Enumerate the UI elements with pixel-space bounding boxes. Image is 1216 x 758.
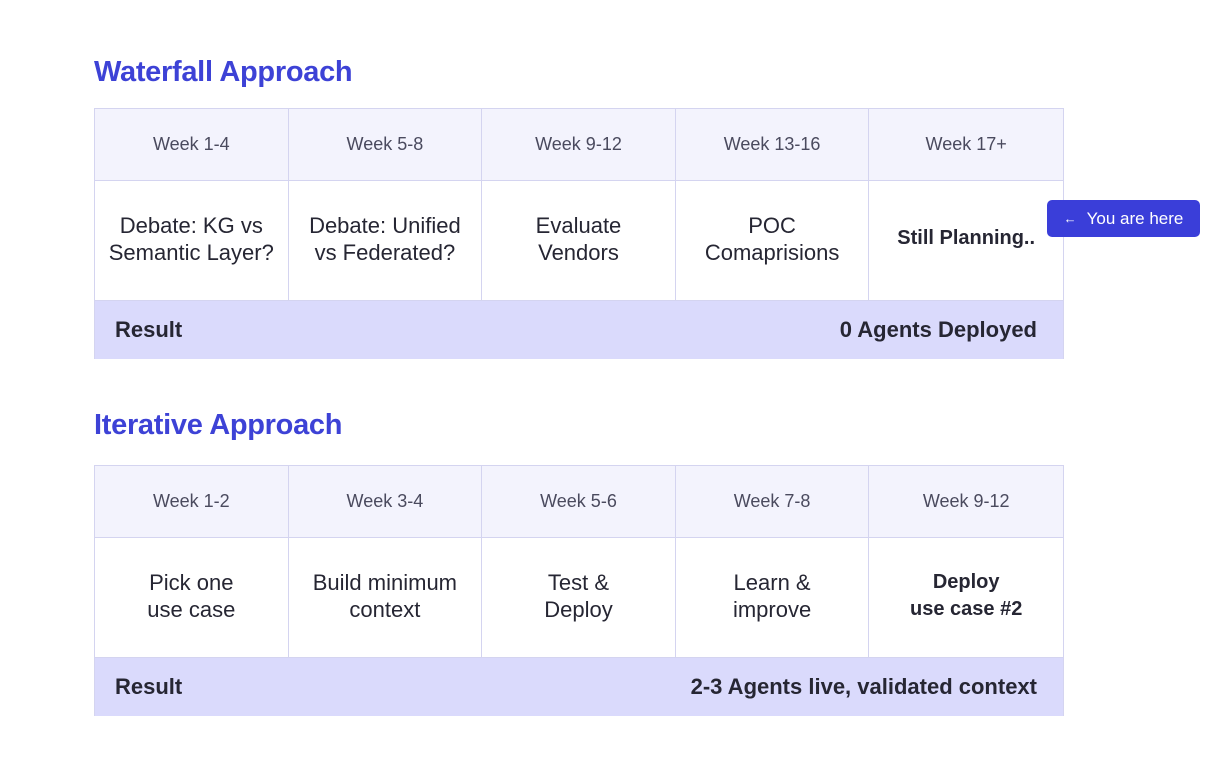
body row: Build minimum <box>313 570 457 594</box>
body row: vs Federated? <box>315 240 455 264</box>
body row: Learn & <box>734 570 811 594</box>
body row <box>95 181 1063 300</box>
header row: Week 1-2 <box>153 491 230 511</box>
body row: POC <box>748 212 796 238</box>
header row: Week 9-12 <box>923 491 1010 511</box>
body row: use case #2 <box>910 598 1022 620</box>
badge: you are here <box>1047 200 1200 237</box>
body row: Debate: KG vs <box>120 212 263 238</box>
result row: 2-3 Agents live, validated context <box>691 674 1037 699</box>
result row: Result <box>115 317 182 342</box>
result row: Result <box>115 674 182 699</box>
body row: Deploy <box>933 570 1000 592</box>
table: iterative <box>94 465 1064 716</box>
header row: Week 17+ <box>926 134 1007 154</box>
header row: Week 5-8 <box>347 134 423 154</box>
body row: context <box>349 596 420 622</box>
body row: Pick one <box>149 570 233 594</box>
header row <box>95 109 1063 181</box>
body row: Semantic Layer? <box>109 240 274 264</box>
table: waterfall <box>94 108 1064 359</box>
header row <box>95 466 1063 538</box>
title: waterfall: Waterfall Approach <box>94 56 352 88</box>
header row: Week 7-8 <box>734 491 810 511</box>
result row <box>95 300 1063 359</box>
body row: use case <box>147 596 235 622</box>
header row: Week 5-6 <box>540 491 617 511</box>
result row <box>95 657 1063 716</box>
title: iterative: Iterative Approach <box>94 409 342 441</box>
result row: 0 Agents Deployed <box>840 317 1037 342</box>
badge: you are here: You are here <box>1087 208 1183 228</box>
body row: Debate: Unified <box>309 212 461 238</box>
body row: Evaluate <box>536 212 621 238</box>
badge: you are here: ← <box>1064 211 1077 226</box>
body row: Still Planning.. <box>897 227 1035 249</box>
header row: Week 13-16 <box>724 134 820 154</box>
body row: Comaprisions <box>705 240 839 264</box>
body row: Test & <box>548 570 609 594</box>
body row: Deploy <box>544 596 613 622</box>
header row: Week 1-4 <box>153 134 230 154</box>
body row: improve <box>733 596 811 622</box>
body row <box>95 538 1063 657</box>
body row: Vendors <box>538 240 619 264</box>
header row: Week 9-12 <box>535 134 622 154</box>
header row: Week 3-4 <box>347 491 423 511</box>
